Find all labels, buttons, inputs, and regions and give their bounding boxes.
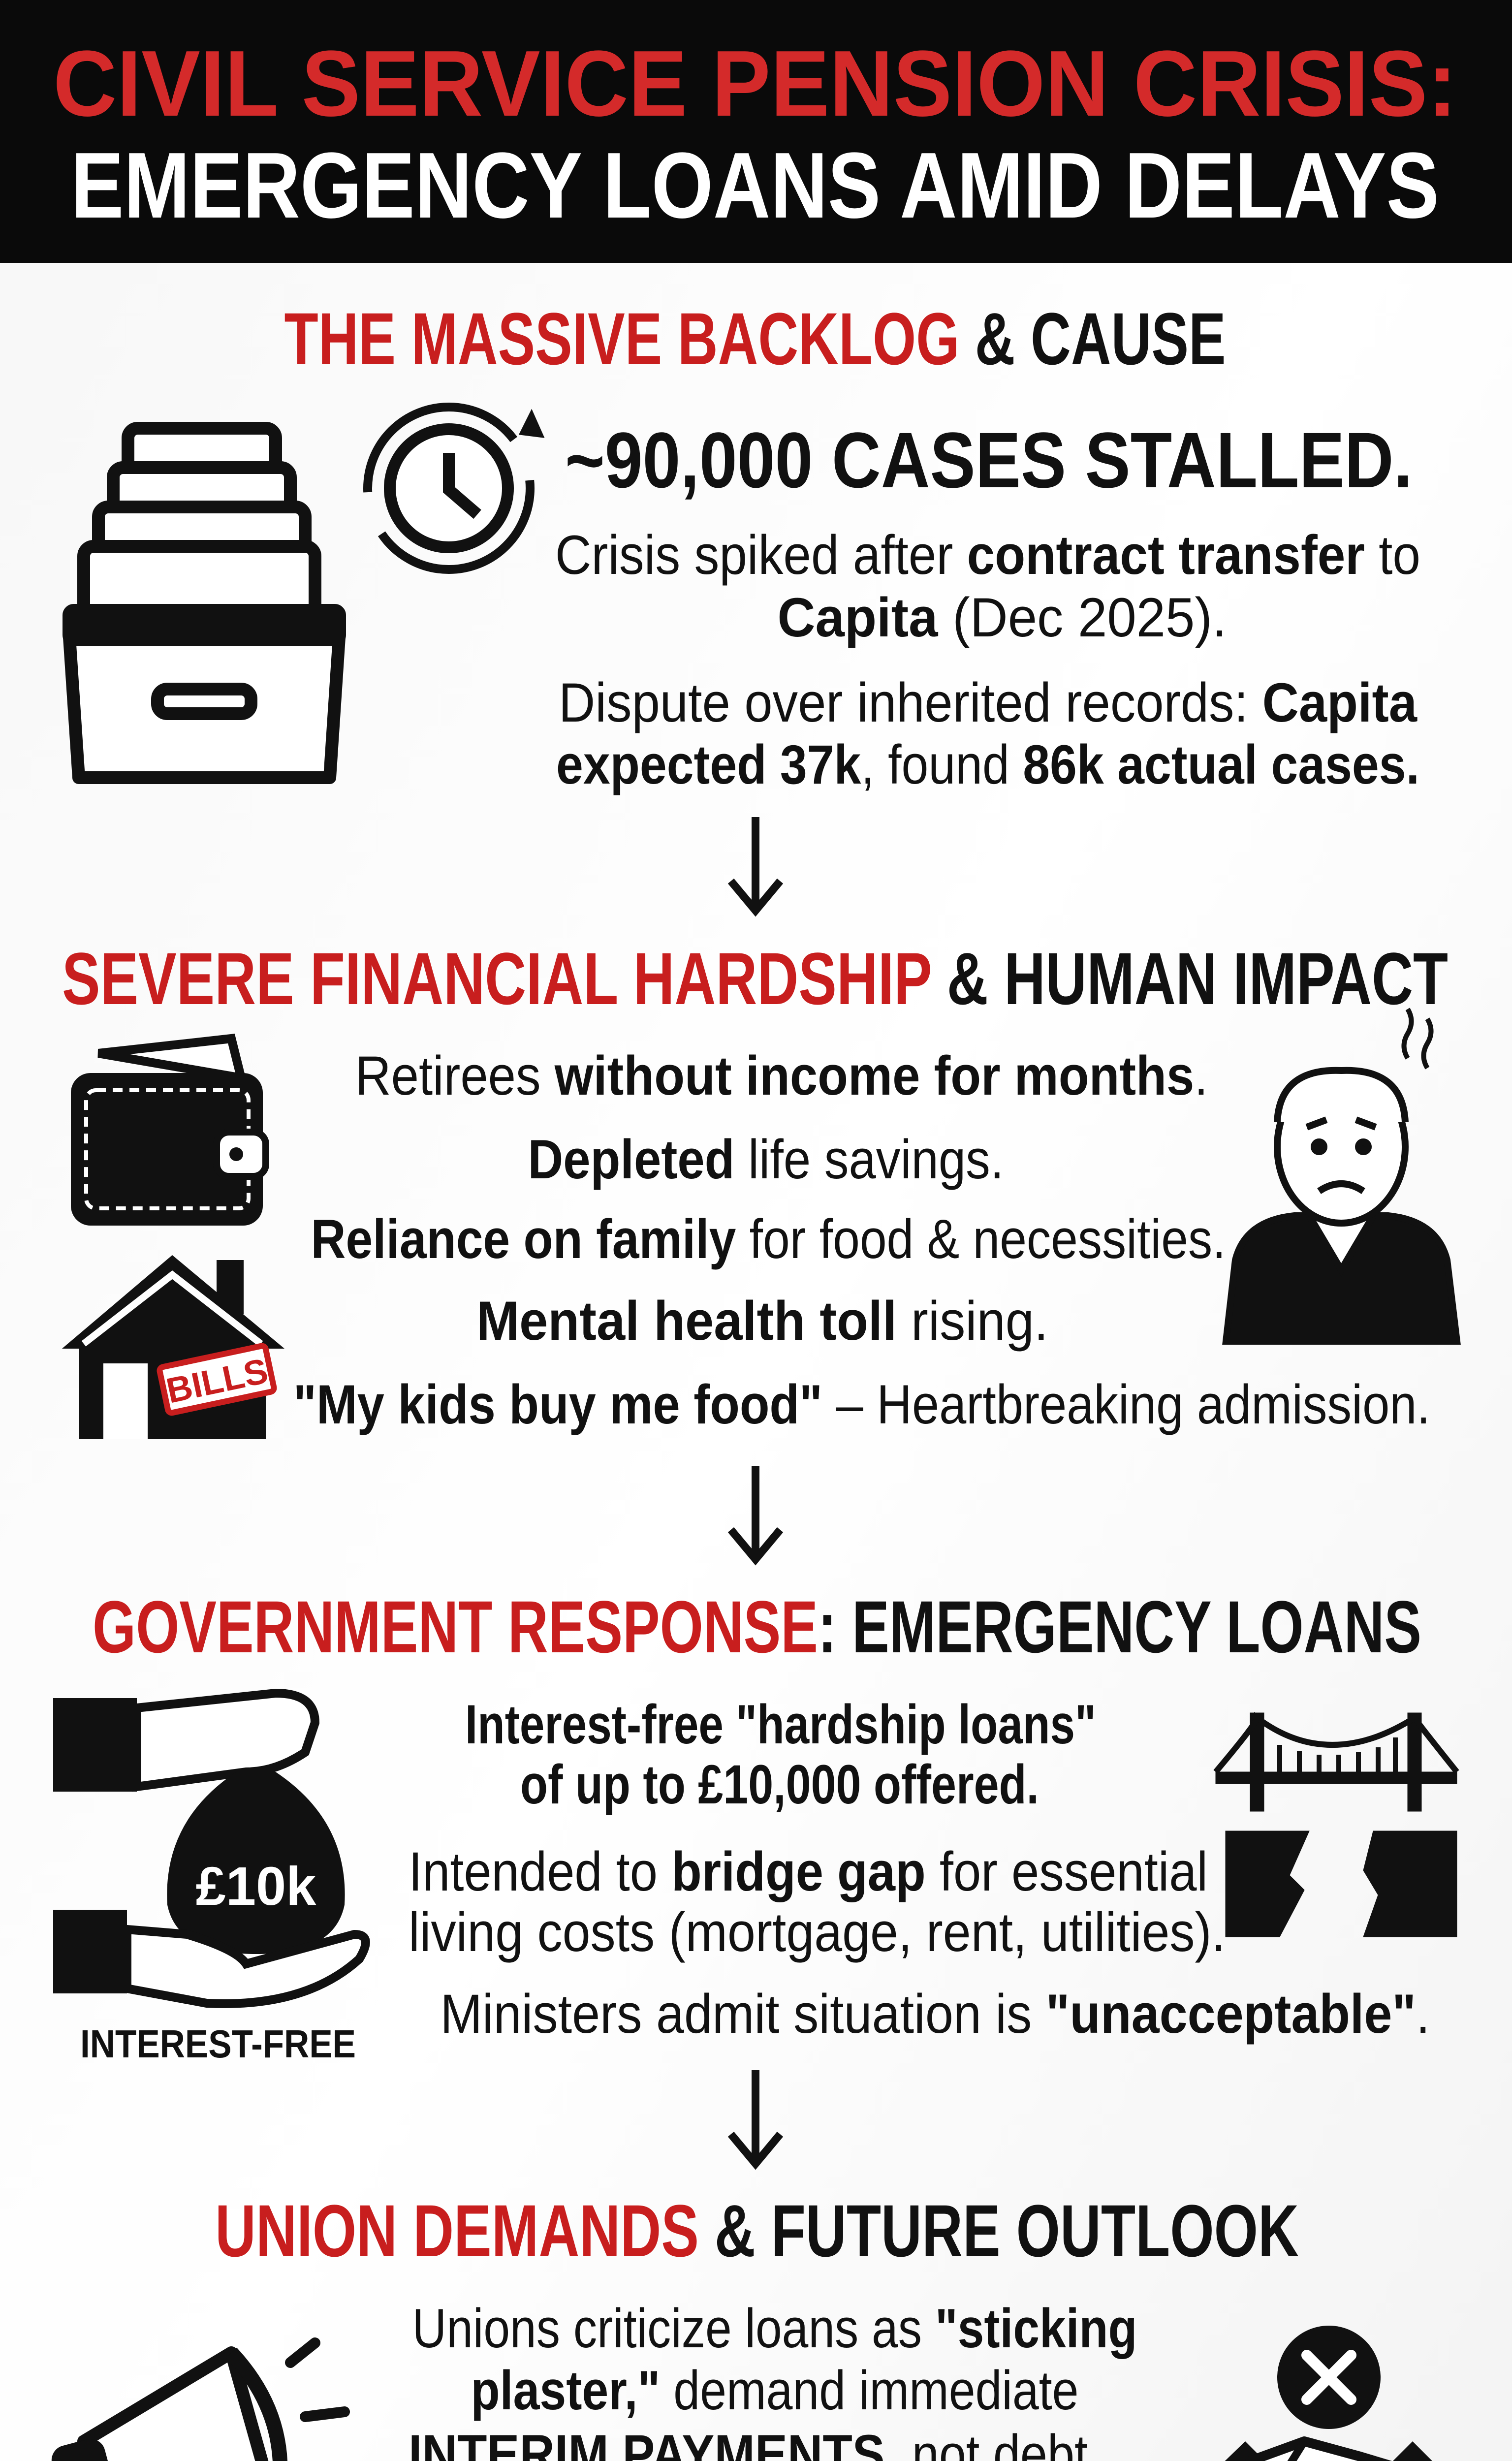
hardship text: Mental health toll rising. <box>476 1290 1048 1352</box>
union text: Unions criticize loans as "sticking <box>412 2298 1137 2359</box>
loan text <box>409 1694 1430 2045</box>
loan text: of up to £10,000 offered. <box>520 1754 1039 1815</box>
loan text: Intended to bridge gap for essential <box>409 1841 1208 1902</box>
icon: file drawer <box>69 428 340 778</box>
cause text <box>555 524 1420 795</box>
hardship text: "My kids buy me food" – Heartbreaking admission. <box>293 1374 1430 1435</box>
icon: worried old man <box>1226 1009 1457 1341</box>
union text: plaster," demand immediate <box>471 2360 1079 2421</box>
loan text: Interest-free "hardship loans" <box>465 1694 1096 1755</box>
icon: house with bills: BILLS <box>163 1351 271 1411</box>
arrow 2 <box>731 1466 780 1559</box>
title banner: CIVIL SERVICE PENSION CRISIS: <box>53 32 1457 136</box>
cause text: Capita (Dec 2025). <box>778 587 1227 648</box>
arrow 1 <box>731 817 780 911</box>
loan text: Ministers admit situation is "unacceptable". <box>440 1983 1430 2045</box>
cause text: Crisis spiked after contract transfer to <box>555 524 1420 586</box>
cause text: Dispute over inherited records: Capita <box>559 672 1418 733</box>
arrow 3 <box>731 2070 780 2164</box>
hardship text: Reliance on family for food & necessities. <box>311 1208 1226 1270</box>
icon: wallet <box>71 1039 266 1226</box>
hardship text: Depleted life savings. <box>528 1129 1004 1190</box>
icon: handshake with X <box>1199 2326 1457 2461</box>
hardship text <box>293 1045 1430 1435</box>
icon: hands with money bag: £10k <box>196 1856 316 1917</box>
section 1 heading: THE MASSIVE BACKLOG & CAUSE <box>284 297 1226 380</box>
icon: broken bridge <box>1216 1713 1457 1937</box>
icon: megaphone <box>49 2343 345 2461</box>
cause text: expected 37k, found 86k actual cases. <box>556 734 1419 795</box>
union text <box>283 2298 1231 2461</box>
loan text: living costs (mortgage, rent, utilities). <box>409 1901 1226 1963</box>
hardship text: Retirees without income for months. <box>355 1045 1208 1106</box>
icon: hands with money bag: INTEREST-FREE <box>80 2022 356 2066</box>
icon: clock <box>368 407 541 569</box>
icon: hands with money bag <box>53 1693 366 2066</box>
icon: house with bills <box>62 1255 284 1439</box>
section 4 heading: UNION DEMANDS & FUTURE OUTLOOK <box>215 2189 1299 2272</box>
title banner <box>0 0 1512 263</box>
